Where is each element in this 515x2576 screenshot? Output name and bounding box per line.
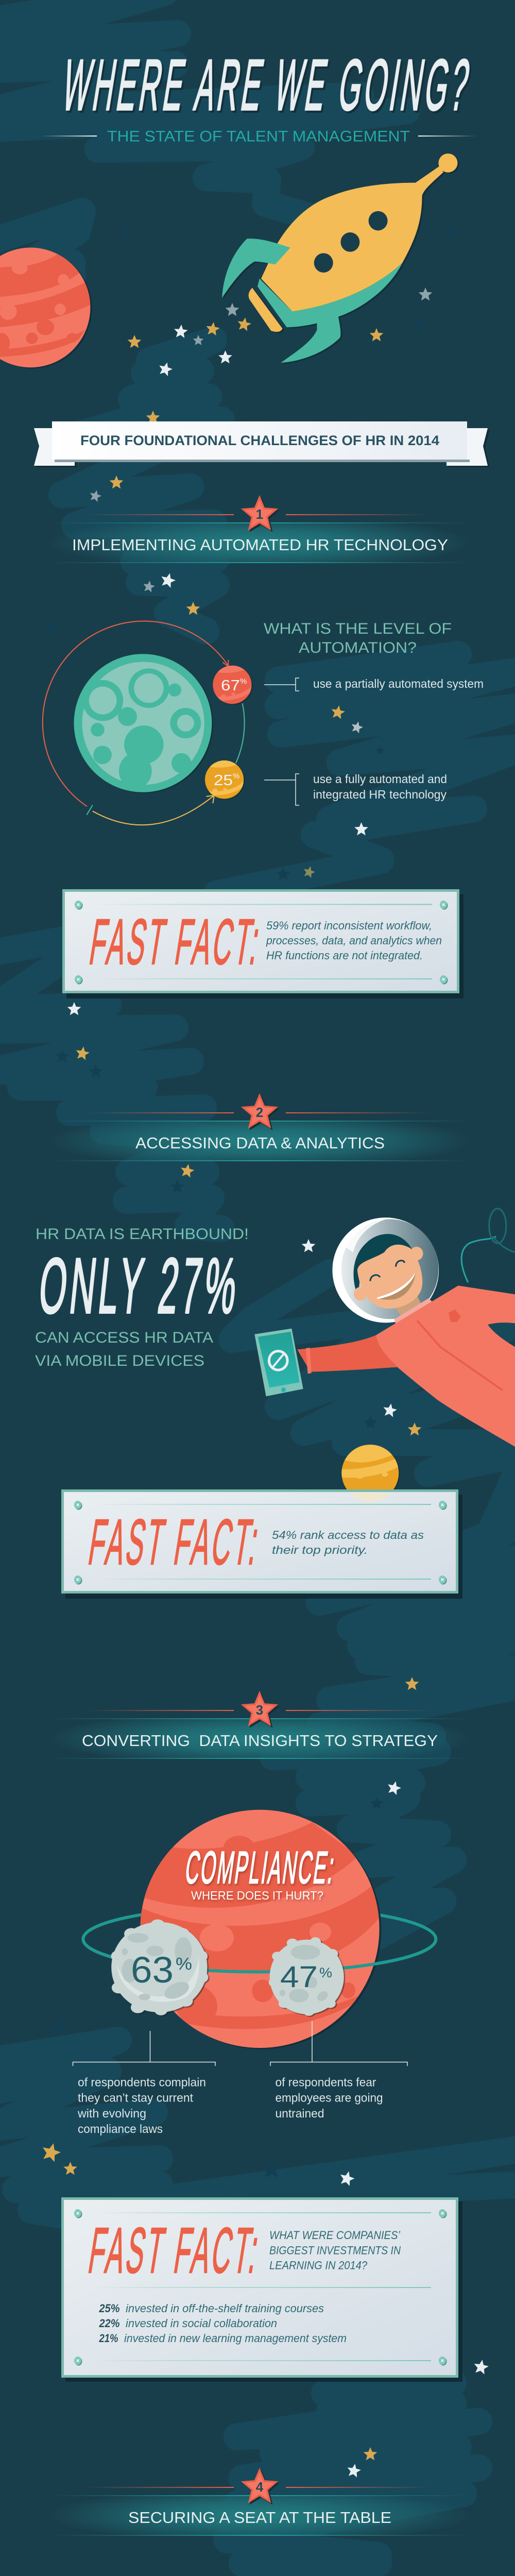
hair: [354, 1234, 412, 1297]
subtitle: THE STATE OF TALENT MANAGEMENT: [107, 128, 410, 145]
number star: 4: [256, 2479, 264, 2495]
mobile text: VIA MOBILE DEVICES: [35, 1352, 204, 1369]
label 25: use a fully automated and: [313, 772, 447, 786]
text 63: they can’t stay current: [78, 2091, 194, 2104]
question heading: [264, 620, 452, 656]
fast fact list: 22%: [99, 2317, 119, 2330]
stat 25 percent: %: [233, 772, 239, 781]
fast fact question: WHAT WERE COMPANIES’: [269, 2229, 401, 2242]
fast fact text: their top priority.: [272, 1544, 368, 1556]
collar: [394, 1298, 435, 1329]
face: [357, 1245, 422, 1309]
fast fact text: HR functions are not integrated.: [266, 949, 423, 962]
number star: 3: [256, 1702, 263, 1718]
text 63: with evolving: [77, 2107, 146, 2120]
orange planet: [341, 1445, 400, 1489]
stat 47 percent: %: [319, 1965, 332, 1980]
stat 25 percent: [214, 772, 239, 789]
earthbound text: HR DATA IS EARTHBOUND!: [36, 1226, 249, 1243]
label 25: integrated HR technology: [313, 788, 447, 801]
planet 67: [213, 666, 252, 705]
ring back: [83, 1906, 436, 1972]
compliance planet with ring: [83, 1810, 436, 2048]
text 63: compliance laws: [78, 2122, 163, 2136]
moon: [74, 654, 212, 792]
fast fact question: [269, 2229, 401, 2272]
cuff: [306, 1348, 312, 1374]
orbit arcs: [43, 621, 245, 825]
fast fact list: [99, 2302, 347, 2345]
connector 67: [264, 678, 299, 691]
tether: [461, 1209, 515, 1282]
banner fold shadow: [55, 460, 470, 462]
fast fact panel 1: FAST FACT:: [85, 906, 267, 978]
number star: [241, 2468, 278, 2503]
stat 63 percent: [131, 1950, 192, 1991]
fast fact list: invested in new learning management system: [124, 2332, 347, 2345]
fast fact text: 59% report inconsistent workflow,: [266, 919, 432, 932]
text 63: of respondents complain: [78, 2075, 206, 2089]
section header 1: [49, 495, 470, 563]
text 47: untrained: [275, 2107, 324, 2120]
banner main: [52, 421, 467, 460]
planet 25: [205, 760, 245, 800]
eyes: [370, 1261, 405, 1281]
neck: [396, 1296, 422, 1318]
suit body: [376, 1285, 515, 1447]
connector 63: [73, 2031, 215, 2066]
stars: section 3: [40, 1677, 490, 2375]
mobile text: [35, 1329, 213, 1369]
rocket windows: [314, 211, 388, 273]
question heading: WHAT IS THE LEVEL OF: [264, 620, 452, 637]
stat 67 percent: [221, 677, 247, 694]
phone: [254, 1329, 303, 1396]
stars: section 4: [85, 2447, 377, 2576]
fast fact list: 25%: [99, 2302, 119, 2315]
automation orbit and planets: [43, 621, 253, 825]
mobile text: CAN ACCESS HR DATA: [35, 1329, 213, 1346]
question heading: AUTOMATION?: [299, 639, 417, 656]
rocket fin: [222, 239, 290, 298]
text 47: employees are going: [275, 2091, 383, 2104]
section header 3: [49, 1691, 470, 1759]
fast fact question: LEARNING IN 2014?: [269, 2259, 368, 2272]
section heading: ACCESSING DATA & ANALYTICS: [135, 1134, 385, 1152]
rocket nozzle: [249, 288, 283, 332]
ears: [354, 1247, 423, 1300]
stat 25 percent: 25: [214, 772, 233, 789]
number star: [241, 1691, 278, 1726]
stat 63 percent: 63: [131, 1950, 174, 1991]
label 25: [313, 772, 447, 801]
section heading: IMPLEMENTING AUTOMATED HR TECHNOLOGY: [72, 536, 448, 554]
fast fact text: 54% rank access to data as: [272, 1529, 424, 1541]
number star: [241, 1093, 278, 1129]
fast fact list: invested in social collaboration: [126, 2317, 277, 2330]
fast fact question: BIGGEST INVESTMENTS IN: [269, 2244, 401, 2257]
fast fact text: [272, 1529, 424, 1556]
section header 2: [49, 1093, 470, 1161]
banner: [34, 421, 488, 466]
connector 47: [270, 2021, 407, 2066]
stars: section 1: [46, 476, 385, 754]
stars: section 2: [56, 1002, 421, 1435]
fast fact panel 2: FAST FACT:: [84, 1506, 266, 1578]
mouth: [377, 1272, 416, 1300]
text 47: [275, 2075, 383, 2120]
compliance heading: WHERE DOES IT HURT?: [191, 1889, 323, 1902]
banner tails: [34, 428, 488, 466]
fast fact list: invested in off-the-shelf training courses: [126, 2302, 324, 2315]
fast fact text: processes, data, and analytics when: [266, 934, 442, 947]
planet: [138, 1810, 384, 2048]
fast fact list: 21%: [99, 2332, 118, 2345]
stat 67 percent: 67: [221, 677, 240, 694]
compliance heading: [182, 1842, 339, 1902]
stat 63 percent: %: [176, 1954, 192, 1973]
number star: [241, 495, 278, 531]
red planet: [0, 248, 95, 367]
rocket antenna: [438, 154, 457, 173]
rocket: [222, 154, 457, 363]
stat 47 percent: 47: [280, 1960, 318, 1994]
fast fact panel 3: FAST FACT:: [84, 2214, 266, 2286]
astronaut: [254, 1209, 515, 1447]
text 63: [77, 2075, 206, 2136]
label 67: use a partially automated system: [313, 677, 484, 690]
banner text: FOUR FOUNDATIONAL CHALLENGES OF HR IN 2014: [80, 433, 439, 448]
fast fact panel 1: [64, 890, 464, 998]
stat 67 percent: %: [240, 677, 247, 686]
fast fact text: [266, 919, 442, 962]
arm: [297, 1335, 398, 1372]
text: ONLY 27%: [36, 1242, 244, 1330]
section heading: SECURING A SEAT AT THE TABLE: [128, 2509, 391, 2527]
asteroid 47: [269, 1937, 344, 2016]
planet showing through: [350, 1493, 390, 1501]
section header 4: [49, 2468, 470, 2536]
rocket lower hull: [258, 263, 402, 363]
stat 47 percent: [280, 1960, 332, 1994]
rocket body: [261, 166, 443, 312]
text 47: of respondents fear: [275, 2075, 376, 2089]
stars: below section 1: [277, 822, 368, 880]
helmet: [332, 1217, 439, 1323]
fast fact panel 3: [63, 2199, 462, 2382]
connector 25: [264, 774, 299, 805]
ring front: [83, 1939, 436, 1972]
asteroid 63: [111, 1920, 208, 2015]
fast fact panel 2: [61, 1489, 462, 1599]
number star: 1: [256, 506, 263, 522]
stars: top region: [119, 224, 458, 423]
suit details: [417, 1320, 503, 1390]
number star: 2: [256, 1105, 263, 1120]
section heading: CONVERTING DATA INSIGHTS TO STRATEGY: [82, 1732, 438, 1750]
